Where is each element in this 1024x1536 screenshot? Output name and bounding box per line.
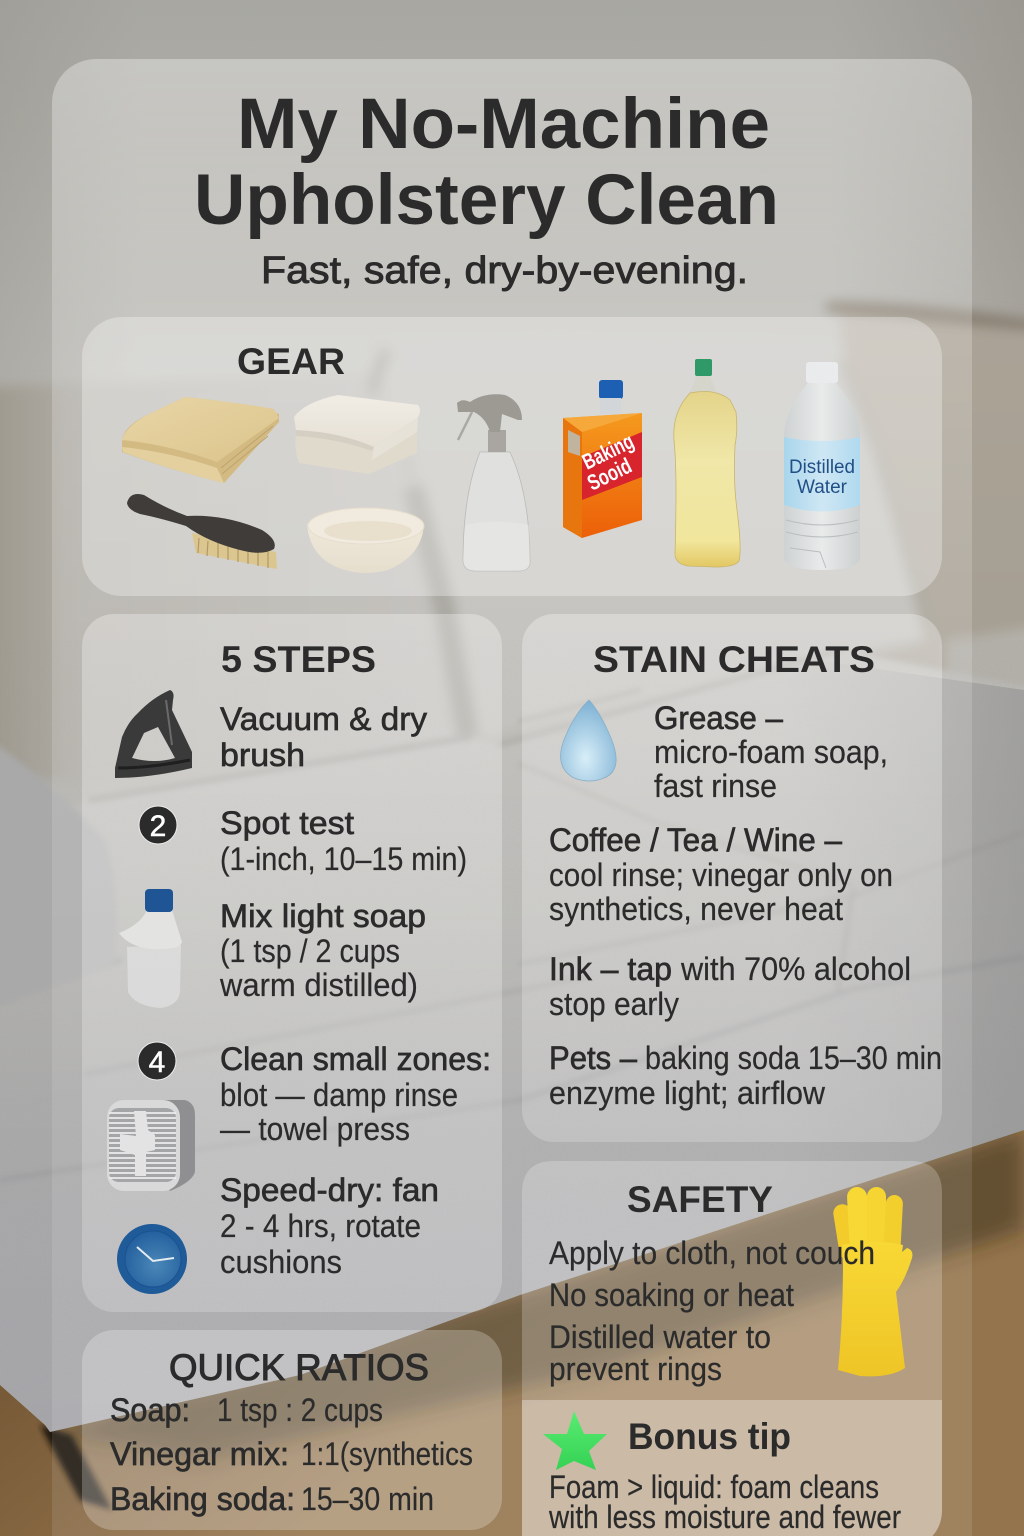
panel: gear: [82, 317, 942, 596]
step 4 text: — towel press: [220, 1111, 410, 1147]
ink tip: with 70% alcohol: [680, 951, 911, 987]
bonus text: [548, 1469, 901, 1535]
title: My No-Machine: [237, 85, 770, 164]
safety rules: Distilled water to: [549, 1319, 771, 1355]
sofa back: [0, 300, 1024, 780]
step 3 text: Mix light soap: [220, 898, 426, 934]
icon: distilled water bottle: Distilled: [789, 457, 855, 478]
grease tip: Grease –: [654, 700, 783, 736]
icon: soap mix bottle: [119, 889, 182, 1008]
safety rules: prevent rings: [549, 1351, 722, 1387]
coffee tea wine tip: [549, 822, 893, 927]
panel: safety: [522, 1161, 942, 1400]
step 2 text: [220, 805, 467, 877]
floor: [0, 1100, 1024, 1536]
sofa arm left: [0, 740, 117, 1010]
ratio: soap: [110, 1392, 383, 1428]
grease tip: [654, 700, 888, 804]
coffee tea wine tip: Coffee / Tea / Wine –: [549, 822, 842, 858]
icon: spray bottle: [457, 394, 530, 571]
icon: number 4: [138, 1042, 176, 1080]
heading: stain cheats: STAIN CHEATS: [593, 639, 875, 680]
panel: 5 steps: [82, 614, 502, 1312]
safety rules: No soaking or heat: [549, 1277, 794, 1313]
pets tip: [549, 1040, 942, 1111]
step 2 text: Spot test: [220, 805, 354, 841]
icon: yellow towel: [122, 397, 279, 483]
icon: baking soda box: [563, 380, 642, 538]
icon: number 4: 4: [149, 1046, 165, 1079]
ratio: soap: 1 tsp : 2 cups: [217, 1392, 383, 1428]
step 1 text: brush: [220, 737, 305, 773]
icon: baking soda box: Sooid: [583, 453, 636, 495]
sofa seat: [0, 640, 1024, 1500]
step 3 text: [219, 898, 426, 1003]
panel: bonus tip: [522, 1400, 942, 1536]
step 3 text: warm distilled): [219, 967, 418, 1003]
icon: white towels: [294, 395, 420, 474]
icon: water drop: [561, 700, 616, 781]
heading: quick ratios: QUICK RATIOS: [169, 1347, 429, 1388]
cushion seams: [91, 737, 470, 800]
bonus text: Foam > liquid: foam cleans: [549, 1469, 879, 1505]
ratio: vinegar: 1:1(synthetics: [301, 1436, 473, 1472]
step 5 text: cushions: [220, 1244, 342, 1280]
pets tip: baking soda 15–30 min: [645, 1040, 942, 1076]
step 1 text: Vacuum & dry: [220, 701, 427, 737]
pets tip: Pets –: [549, 1040, 637, 1076]
icon: clock: [117, 1224, 187, 1294]
heading: bonus tip: Bonus tip: [628, 1416, 791, 1457]
ratio: soap: Soap:: [110, 1392, 190, 1428]
icon: brush: [127, 494, 277, 569]
step 3 text: (1 tsp / 2 cups: [220, 933, 400, 969]
title: Upholstery Clean: [194, 161, 779, 240]
step 1 text: [220, 701, 427, 773]
safety rules: [549, 1235, 875, 1387]
ratio: vinegar: Vinegar mix:: [110, 1436, 289, 1472]
ink tip: Ink – tap: [549, 951, 672, 987]
step 2 text: (1-inch, 10–15 min): [220, 841, 467, 877]
icon: dish soap bottle: [674, 359, 740, 567]
ratio: vinegar: [110, 1436, 473, 1472]
panel: stain cheats: [522, 614, 942, 1142]
icon: vacuum brush head: [115, 690, 192, 778]
ink tip: stop early: [549, 986, 679, 1022]
grease tip: micro-foam soap,: [654, 734, 888, 770]
icon: bowl: [307, 508, 424, 573]
bonus text: with less moisture and fewer: [548, 1499, 901, 1535]
panel: quick ratios: [82, 1330, 502, 1530]
coffee tea wine tip: synthetics, never heat: [549, 891, 843, 927]
heading: 5 steps: 5 STEPS: [221, 639, 376, 680]
icon: distilled water bottle: Water: [797, 477, 848, 498]
step 4 text: Clean small zones:: [220, 1041, 491, 1077]
safety rules: Apply to cloth, not couch: [549, 1235, 875, 1271]
icon: green star: [543, 1411, 607, 1470]
ratio: baking soda: Baking soda:: [110, 1481, 295, 1517]
icon: number 2: 2: [150, 810, 166, 843]
heading: gear: GEAR: [237, 341, 345, 382]
ink tip: [549, 951, 911, 1022]
title: [194, 85, 779, 240]
subtitle: Fast, safe, dry-by-evening.: [261, 250, 748, 292]
icon: box fan: [107, 1100, 195, 1191]
icon: yellow rubber glove: [832, 1187, 912, 1376]
icon: distilled water bottle: [784, 362, 860, 570]
step 5 text: 2 - 4 hrs, rotate: [220, 1208, 421, 1244]
step 4 text: [220, 1041, 491, 1147]
step 5 text: Speed-dry: fan: [220, 1172, 439, 1208]
ratio: baking soda: [110, 1481, 434, 1517]
heading: safety: SAFETY: [627, 1179, 773, 1220]
icon: number 2: [139, 806, 177, 844]
grease tip: fast rinse: [654, 768, 777, 804]
ratio: baking soda: 15–30 min: [301, 1481, 434, 1517]
icon: baking soda box: Baking: [578, 428, 638, 474]
coffee tea wine tip: cool rinse; vinegar only on: [549, 857, 893, 893]
step 4 text: blot — damp rinse: [220, 1077, 458, 1113]
step 5 text: [220, 1172, 439, 1280]
pets tip: enzyme light; airflow: [549, 1075, 826, 1111]
